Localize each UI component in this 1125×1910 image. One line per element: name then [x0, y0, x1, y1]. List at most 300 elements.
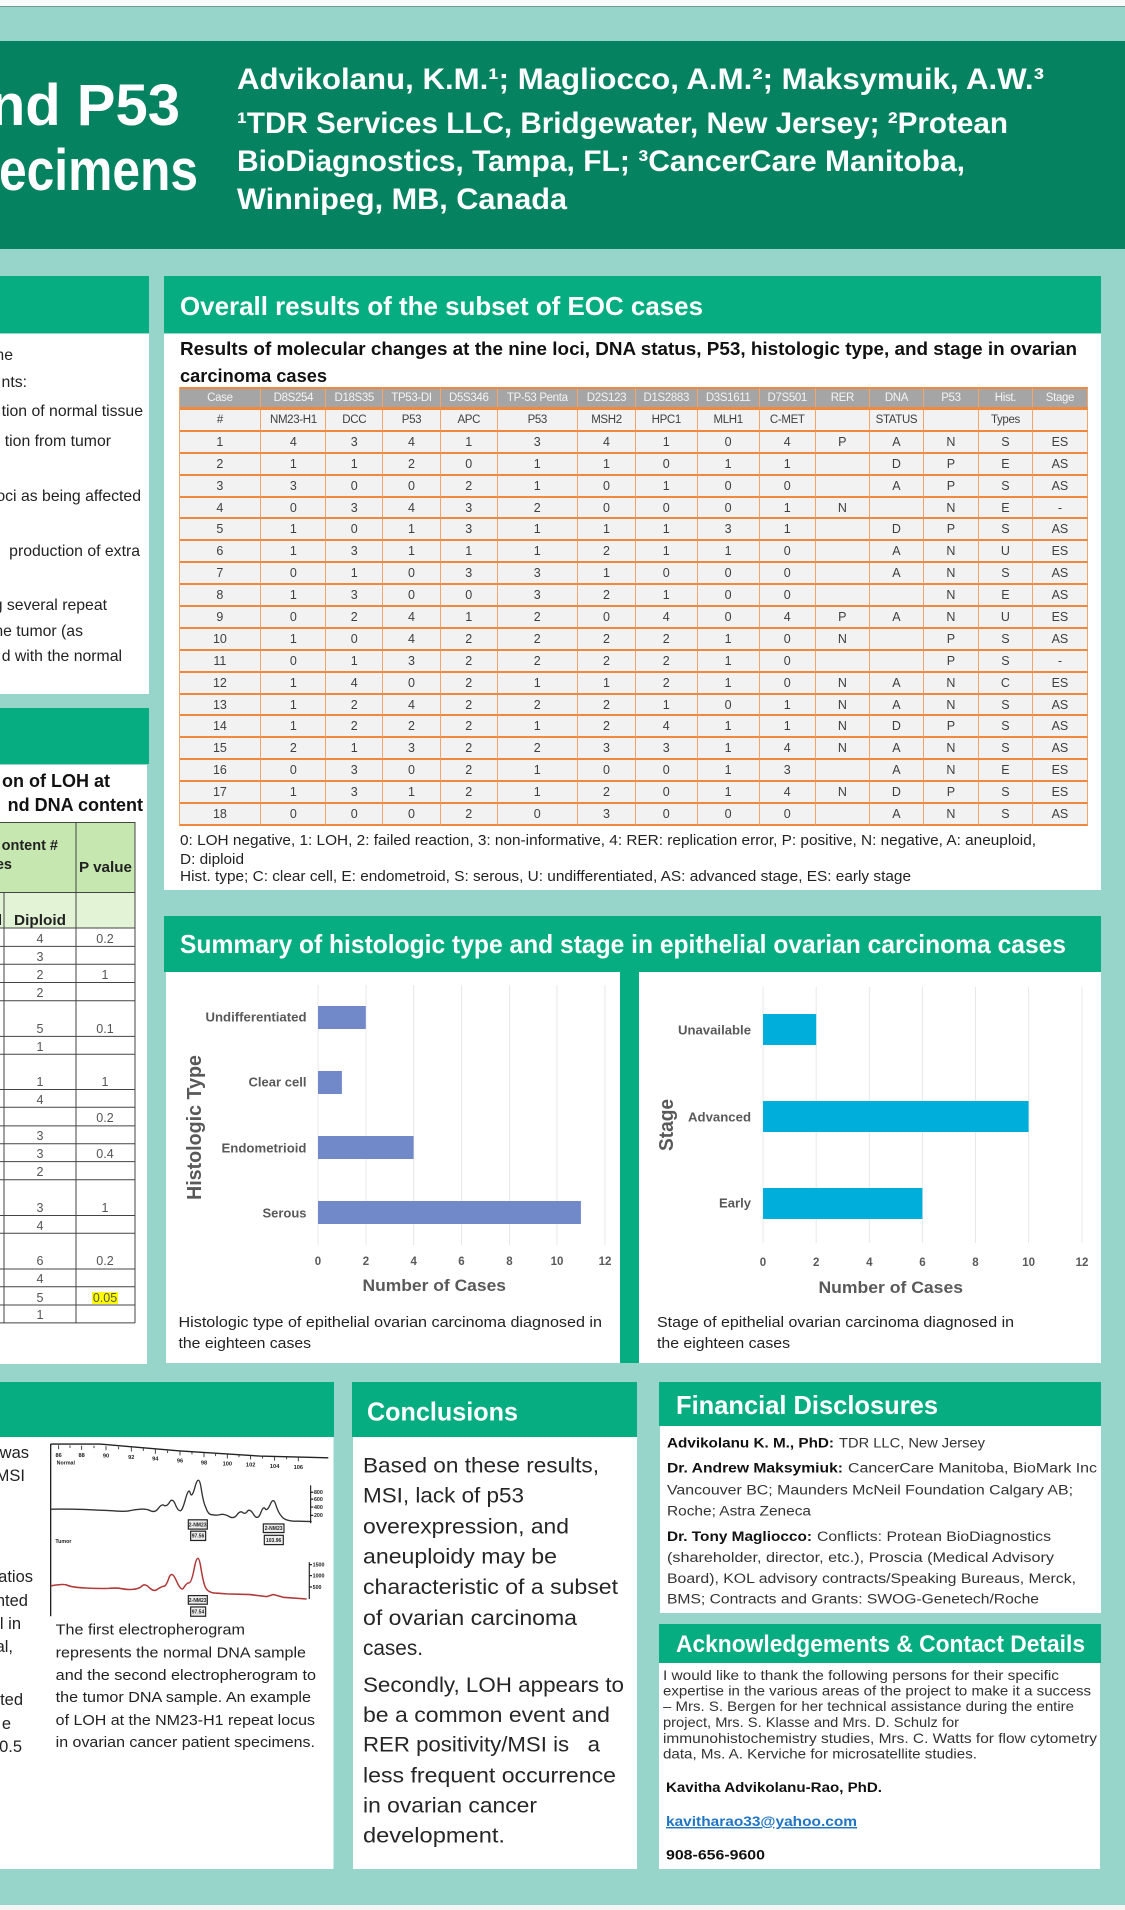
results table: molecular changes at nine loci: S: [1001, 807, 1010, 821]
results table: molecular changes at nine loci: N: [838, 500, 847, 514]
results table: molecular changes at nine loci: 0: [408, 676, 415, 690]
results table: molecular changes at nine loci: 0: [784, 566, 791, 580]
electropherogram figure: 94: [152, 1457, 159, 1463]
results table: molecular changes at nine loci: 12: [213, 676, 227, 690]
table legend: D: diploid: [180, 852, 244, 868]
table legend: [180, 833, 1036, 885]
electropherogram figure: 97.56: [192, 1534, 204, 1540]
results table: molecular changes at nine loci: S: [1001, 698, 1010, 712]
results table: molecular changes at nine loci: 2: [603, 544, 610, 558]
results table: molecular changes at nine loci: N: [946, 698, 955, 712]
panel: overall results: [164, 276, 1101, 890]
results table: molecular changes at nine loci: 3: [603, 741, 610, 755]
results table: molecular changes at nine loci: 2: [603, 719, 610, 733]
panel heading: Summary of histologic type and stage in epithelial ovarian carcinoma cases: [180, 929, 1066, 959]
results table: molecular changes at nine loci: 0: [351, 479, 358, 493]
results table: molecular changes at nine loci: 2: [663, 676, 670, 690]
results table: molecular changes at nine loci: 1: [351, 566, 358, 580]
results table: molecular changes at nine loci: S: [1001, 435, 1010, 449]
results table: molecular changes at nine loci: C: [1001, 676, 1010, 690]
results table: molecular changes at nine loci: 2: [465, 719, 472, 733]
disclosures text: Vancouver BC; Maunders McNeil Foundation Calgary AB;: [667, 1483, 1073, 1499]
results table: molecular changes at nine loci: 0: [290, 654, 297, 668]
results table: molecular changes at nine loci: AS: [1052, 522, 1068, 536]
results table: molecular changes at nine loci: N: [946, 763, 955, 777]
results table: molecular changes at nine loci: 0: [408, 479, 415, 493]
acknowledgements text: immunohistochemistry studies, Mrs. C. Watts for flow cytometry: [663, 1731, 1097, 1746]
results table: molecular changes at nine loci: AS: [1052, 719, 1068, 733]
results table: molecular changes at nine loci: P: [947, 785, 955, 799]
results table: molecular changes at nine loci: P: [838, 610, 847, 624]
bar chart: stage: Stage: [656, 1099, 678, 1151]
electropherogram figure: 86: [56, 1453, 62, 1459]
results table: molecular changes at nine loci: 2: [534, 654, 541, 668]
results table: molecular changes at nine loci: A: [892, 698, 901, 712]
results table: molecular changes at nine loci: 16: [213, 763, 227, 777]
bar chart: histologic type: 4: [410, 1256, 417, 1268]
results table: molecular changes at nine loci: AS: [1052, 566, 1068, 580]
results table: molecular changes at nine loci: ES: [1052, 544, 1068, 558]
acknowledgements text: – Mrs. S. Bergen for her technical assistance during the entire: [663, 1699, 1074, 1714]
conclusions text: overexpression, and: [363, 1515, 569, 1539]
chart caption: histologic type: [178, 1314, 602, 1352]
authors and affiliations: [237, 63, 1044, 216]
results table: molecular changes at nine loci: 0: [784, 588, 791, 602]
results table: molecular changes at nine loci: S: [1001, 632, 1010, 646]
panel heading: Overall results of the subset of EOC cases: [180, 291, 703, 321]
results table: molecular changes at nine loci: D: [892, 785, 901, 799]
LOH table: 2: [37, 986, 44, 1000]
results table: molecular changes at nine loci: E: [1001, 763, 1010, 777]
definitions text: oci as being affected: [0, 488, 141, 505]
LOH table: 1: [102, 968, 109, 982]
results table: molecular changes at nine loci: D5S346: [449, 392, 489, 404]
results table: molecular changes at nine loci: 0: [784, 676, 791, 690]
results table: molecular changes at nine loci: ES: [1052, 435, 1068, 449]
disclosures text: Dr. Tony Magliocco:: [667, 1529, 812, 1545]
results table: molecular changes at nine loci: 2: [663, 632, 670, 646]
results table: molecular changes at nine loci: 11: [213, 654, 226, 668]
results table: molecular changes at nine loci: 1: [465, 610, 472, 624]
results table: molecular changes at nine loci: S: [1001, 522, 1010, 536]
results table: molecular changes at nine loci: P: [947, 479, 955, 493]
LOH table: Diploid: [14, 913, 66, 929]
table caption: Results of molecular changes at the nine loci, DNA status, P53, histologic type, and stage in ovarian: [180, 338, 1077, 359]
results table: molecular changes at nine loci: 1: [784, 698, 791, 712]
figure caption: represents the normal DNA sample: [56, 1644, 306, 1662]
results table: molecular changes at nine loci: 3: [465, 522, 472, 536]
results table: molecular changes at nine loci: 7: [216, 566, 223, 580]
results table: molecular changes at nine loci: P53: [402, 414, 421, 426]
results table: molecular changes at nine loci: N: [838, 676, 847, 690]
table caption: [180, 338, 1077, 386]
panel heading: Conclusions: [367, 1396, 518, 1426]
bar chart: histologic type: Undifferentiated: [206, 1010, 306, 1024]
results table: molecular changes at nine loci: 0: [290, 807, 297, 821]
results table: molecular changes at nine loci: U: [1001, 610, 1010, 624]
results table: molecular changes at nine loci: 2: [465, 676, 472, 690]
results table: molecular changes at nine loci: D: [892, 522, 901, 536]
results table: molecular changes at nine loci: -: [1058, 654, 1062, 668]
results table: molecular changes at nine loci: D: [892, 719, 901, 733]
electropherogram figure: Tumor: [55, 1539, 72, 1545]
electropherogram figure: 102: [246, 1462, 255, 1468]
results table: molecular changes at nine loci: 0: [290, 566, 297, 580]
results table: molecular changes at nine loci: 0: [663, 457, 670, 471]
results table: molecular changes at nine loci: 4: [408, 632, 415, 646]
LOH table: [0, 822, 135, 1323]
bar chart: stage: 6: [919, 1257, 926, 1269]
panel: conclusions: [352, 1382, 637, 1869]
results table: molecular changes at nine loci: 1: [603, 457, 610, 471]
results table: molecular changes at nine loci: #: [217, 414, 223, 426]
results table: molecular changes at nine loci: A: [892, 807, 901, 821]
results table: molecular changes at nine loci: N: [946, 588, 955, 602]
LOH table: 5: [37, 1022, 44, 1036]
results table: molecular changes at nine loci: 6: [216, 544, 223, 558]
results table: molecular changes at nine loci: 4: [408, 610, 415, 624]
results table: molecular changes at nine loci: 1: [725, 719, 732, 733]
results table: molecular changes at nine loci: 1: [290, 457, 297, 471]
results table: molecular changes at nine loci: 0: [290, 610, 297, 624]
authors and affiliations: ¹TDR Services LLC, Bridgewater, New Jersey; ²Protean: [237, 107, 1008, 140]
disclosures text: (shareholder, director, etc.), Proscia (Medical Advisory: [667, 1550, 1055, 1566]
results table: molecular changes at nine loci: 2: [351, 610, 358, 624]
results table: molecular changes at nine loci: 1: [408, 522, 415, 536]
bar chart: histologic type: Clear cell: [248, 1076, 306, 1090]
LOH table: 0.05: [93, 1291, 117, 1305]
bar chart: stage: 12: [1076, 1257, 1088, 1269]
results table: molecular changes at nine loci: 2: [465, 807, 472, 821]
results table: molecular changes at nine loci: 13: [213, 698, 227, 712]
results table: molecular changes at nine loci: 3: [351, 544, 358, 558]
results table: molecular changes at nine loci: ES: [1052, 763, 1068, 777]
results table: molecular changes at nine loci: 0: [725, 610, 732, 624]
results table: molecular changes at nine loci: S: [1001, 566, 1010, 580]
conclusions text: Secondly, LOH appears to: [363, 1673, 624, 1697]
results table: molecular changes at nine loci: 2: [465, 654, 472, 668]
results table: molecular changes at nine loci: D8S254: [274, 392, 313, 404]
results table: molecular changes at nine loci: N: [946, 741, 955, 755]
results table: molecular changes at nine loci: 1: [725, 676, 732, 690]
results table: molecular changes at nine loci: 2: [534, 741, 541, 755]
LOH table: P value: [79, 860, 132, 876]
results table: molecular changes at nine loci: 3: [534, 435, 541, 449]
results table: molecular changes at nine loci: 8: [216, 588, 223, 602]
figure caption: of LOH at the NM23-H1 repeat locus: [56, 1712, 315, 1729]
conclusions text: less frequent occurrence: [363, 1764, 616, 1788]
results table: molecular changes at nine loci: 2: [408, 457, 415, 471]
results table: molecular changes at nine loci: 4: [663, 719, 670, 733]
results table: molecular changes at nine loci: STATUS: [876, 414, 917, 426]
chart caption: histologic type: the eighteen cases: [178, 1335, 311, 1352]
results table: molecular changes at nine loci: S: [1001, 719, 1010, 733]
results table: molecular changes at nine loci: 3: [534, 566, 541, 580]
results table: molecular changes at nine loci: 0: [408, 763, 415, 777]
results table: molecular changes at nine loci: 2: [663, 654, 670, 668]
results table: molecular changes at nine loci: 2: [465, 698, 472, 712]
panel: summary of histologic type and stage: [164, 916, 1101, 1363]
results table: molecular changes at nine loci: A: [892, 763, 901, 777]
results table: molecular changes at nine loci: 15: [213, 741, 227, 755]
contact details: Kavitha Advikolanu-Rao, PhD.: [666, 1780, 882, 1796]
results table: molecular changes at nine loci: 3: [351, 785, 358, 799]
results table: molecular changes at nine loci: 1: [725, 544, 732, 558]
LOH table: 1: [37, 1308, 44, 1322]
disclosures text: [667, 1436, 1097, 1608]
results table: molecular changes at nine loci: 0: [408, 807, 415, 821]
results table: molecular changes at nine loci: 3: [351, 500, 358, 514]
authors and affiliations: Advikolanu, K.M.¹; Magliocco, A.M.²; Maksymuik, A.W.³: [237, 63, 1044, 96]
results table: molecular changes at nine loci: NM23-H1: [270, 414, 317, 426]
bar chart: stage: 0: [760, 1257, 766, 1269]
LOH table: 1: [37, 1075, 44, 1089]
results table: molecular changes at nine loci: 2: [603, 588, 610, 602]
bar chart: histologic type: 2: [363, 1256, 369, 1268]
bar chart: histologic type: 8: [506, 1256, 513, 1268]
figure caption: The first electropherogram: [56, 1622, 245, 1638]
results table: molecular changes at nine loci: 0: [534, 807, 541, 821]
results table: molecular changes at nine loci: 3: [351, 435, 358, 449]
LOH table: 0.2: [96, 932, 114, 946]
table caption: carcinoma cases: [180, 365, 327, 386]
results table: molecular changes at nine loci: RER: [831, 392, 854, 404]
results table: molecular changes at nine loci: AS: [1052, 457, 1068, 471]
cropped body text: [0, 1444, 33, 1756]
results table: molecular changes at nine loci: Types: [991, 414, 1020, 426]
results table: molecular changes at nine loci: 3: [465, 566, 472, 580]
electropherogram figure: 104: [270, 1464, 280, 1470]
results table: molecular changes at nine loci: 0: [663, 807, 670, 821]
results table: molecular changes at nine loci: 0: [784, 807, 791, 821]
results table: molecular changes at nine loci: 3: [216, 479, 223, 493]
electropherogram figure: 1500: [313, 1563, 324, 1569]
results table: molecular changes at nine loci: 0: [465, 588, 472, 602]
results table: molecular changes at nine loci: 0: [725, 588, 732, 602]
contact details: kavitharao33@yahoo.com: [666, 1814, 857, 1830]
results table: molecular changes at nine loci: 9: [216, 610, 223, 624]
results table: molecular changes at nine loci: 0: [725, 807, 732, 821]
results table: molecular changes at nine loci: 1: [534, 544, 541, 558]
results table: molecular changes at nine loci: 1: [290, 588, 297, 602]
figure caption: [56, 1622, 316, 1751]
results table: molecular changes at nine loci: A: [892, 544, 901, 558]
acknowledgements text: expertise in the various areas of the project to make it a success: [663, 1683, 1091, 1698]
results table: molecular changes at nine loci: D3S1611: [706, 392, 750, 404]
results table: molecular changes at nine loci: 3: [534, 588, 541, 602]
results table: molecular changes at nine loci: S: [1001, 654, 1010, 668]
results table: molecular changes at nine loci: D1S2883: [644, 392, 689, 404]
results table: molecular changes at nine loci: AS: [1052, 698, 1068, 712]
results table: molecular changes at nine loci: 0: [603, 500, 610, 514]
results table: molecular changes at nine loci: 1: [351, 654, 358, 668]
acknowledgements text: I would like to thank the following persons for their specific: [663, 1668, 1059, 1683]
disclosures text: Dr. Andrew Maksymiuk:: [667, 1461, 843, 1477]
results table: molecular changes at nine loci: A: [892, 610, 901, 624]
results table: molecular changes at nine loci: P: [947, 654, 955, 668]
results table: molecular changes at nine loci: 0: [603, 479, 610, 493]
results table: molecular changes at nine loci: 0: [784, 479, 791, 493]
table heading: nd DNA content: [8, 795, 143, 815]
conclusions text: aneuploidy may be: [363, 1544, 557, 1568]
results table: molecular changes at nine loci: N: [946, 610, 955, 624]
results table: molecular changes at nine loci: 1: [603, 676, 610, 690]
results table: molecular changes at nine loci: 0: [784, 632, 791, 646]
definitions text: d with the normal: [2, 648, 122, 665]
results table: molecular changes at nine loci: 4: [351, 676, 358, 690]
conclusions text: development.: [363, 1824, 505, 1848]
electropherogram figure: 2-NM23: [189, 1522, 207, 1528]
bar chart: stage: 2: [813, 1257, 819, 1269]
disclosures text: Board), KOL advisory contracts/Speaking Bureaus, Merck,: [667, 1571, 1076, 1587]
results table: molecular changes at nine loci: 4: [290, 435, 297, 449]
cropped body text: l in: [0, 1615, 21, 1633]
LOH table: 2: [37, 968, 44, 982]
results table: molecular changes at nine loci: 0: [663, 763, 670, 777]
authors and affiliations: BioDiagnostics, Tampa, FL; ³CancerCare Manitoba,: [237, 145, 965, 178]
electropherogram figure: 2-NM23: [265, 1526, 283, 1532]
LOH table: 5: [37, 1291, 44, 1305]
results table: molecular changes at nine loci: 1: [465, 435, 472, 449]
bar chart: histologic type: 0: [315, 1256, 321, 1268]
results table: molecular changes at nine loci: MLH1: [714, 414, 743, 426]
results table: molecular changes at nine loci: 1: [534, 719, 541, 733]
results table: molecular changes at nine loci: D18S35: [334, 392, 374, 404]
results table: molecular changes at nine loci: 1: [725, 654, 732, 668]
results table: molecular changes at nine loci: 1: [663, 544, 670, 558]
results table: molecular changes at nine loci: 1: [534, 676, 541, 690]
panel heading: Acknowledgements & Contact Details: [676, 1631, 1085, 1658]
disclosures text: Roche; Astra Zeneca: [667, 1504, 811, 1520]
LOH table: 4: [37, 932, 44, 946]
figure caption: and the second electropherogram to: [56, 1667, 316, 1684]
results table: molecular changes at nine loci: 1: [725, 763, 732, 777]
results table: molecular changes at nine loci: N: [838, 741, 847, 755]
bar chart: stage: 8: [972, 1257, 979, 1269]
panel: methods and electropherogram (cropped left): [0, 1382, 334, 1869]
results table: molecular changes at nine loci: 0: [725, 479, 732, 493]
results table: molecular changes at nine loci: 2: [465, 741, 472, 755]
results table: molecular changes at nine loci: U: [1001, 544, 1010, 558]
results table: molecular changes at nine loci: DNA: [885, 392, 908, 404]
LOH table: 6: [37, 1254, 44, 1268]
results table: molecular changes at nine loci: 17: [213, 785, 227, 799]
results table: molecular changes at nine loci: 1: [663, 435, 670, 449]
electropherogram figure: 1000: [313, 1574, 324, 1580]
results table: molecular changes at nine loci: 2: [408, 719, 415, 733]
results table: molecular changes at nine loci: MSH2: [591, 414, 622, 426]
results table: molecular changes at nine loci: 3: [408, 654, 415, 668]
results table: molecular changes at nine loci: 2: [603, 698, 610, 712]
LOH table: 4: [37, 1219, 44, 1233]
figure caption: in ovarian cancer patient specimens.: [56, 1734, 315, 1751]
results table: molecular changes at nine loci: N: [946, 500, 955, 514]
results table: molecular changes at nine loci: 1: [290, 676, 297, 690]
results table: molecular changes at nine loci: 0: [784, 654, 791, 668]
bar chart: stage: Advanced: [688, 1110, 751, 1124]
results table: molecular changes at nine loci: 2: [290, 741, 297, 755]
results table: molecular changes at nine loci: 0: [725, 500, 732, 514]
cropped body text: was: [0, 1444, 29, 1462]
results table: molecular changes at nine loci: HPC1: [652, 414, 681, 426]
electropherogram figure: 400: [314, 1505, 323, 1511]
results table: molecular changes at nine loci: AS: [1052, 741, 1068, 755]
results table: molecular changes at nine loci: N: [838, 719, 847, 733]
conclusions text: of ovarian carcinoma: [363, 1606, 577, 1630]
LOH table: 0.2: [96, 1254, 114, 1268]
results table: molecular changes at nine loci: 0: [351, 807, 358, 821]
LOH table: 3: [37, 1201, 44, 1215]
electropherogram figure: 100: [223, 1462, 232, 1468]
definitions text: tion of normal tissue: [2, 403, 143, 420]
results table: molecular changes at nine loci: 0: [290, 763, 297, 777]
results table: molecular changes at nine loci: 18: [213, 807, 227, 821]
results table: molecular changes at nine loci: N: [838, 632, 847, 646]
results table: molecular changes at nine loci: ES: [1052, 676, 1068, 690]
results table: molecular changes at nine loci: AS: [1052, 588, 1068, 602]
results table: molecular changes at nine loci: 1: [784, 719, 791, 733]
results table: molecular changes at nine loci: N: [946, 435, 955, 449]
results table: molecular changes at nine loci: 2: [603, 654, 610, 668]
LOH table: ontent #: [2, 838, 58, 854]
bar chart: histologic type: Number of Cases: [362, 1277, 506, 1295]
results table: molecular changes at nine loci: 1: [663, 522, 670, 536]
bar chart: stage: 10: [1022, 1257, 1035, 1269]
results table: molecular changes at nine loci: 2: [351, 719, 358, 733]
results table: molecular changes at nine loci: N: [946, 544, 955, 558]
results table: molecular changes at nine loci: 2: [351, 698, 358, 712]
results table: molecular changes at nine loci: 0: [725, 566, 732, 580]
results table: molecular changes at nine loci: A: [892, 479, 901, 493]
results table: molecular changes at nine loci: 1: [725, 785, 732, 799]
results table: molecular changes at nine loci: 1: [408, 544, 415, 558]
conclusions text: RER positivity/MSI is a: [363, 1732, 600, 1756]
results table: molecular changes at nine loci: 4: [663, 610, 670, 624]
LOH table: 2: [37, 1165, 44, 1179]
electropherogram figure: 88: [79, 1453, 86, 1459]
results table: molecular changes at nine loci: 1: [663, 698, 670, 712]
LOH table: 3: [37, 1147, 44, 1161]
electropherogram figure: Normal: [57, 1461, 75, 1467]
electropherogram figure: 96: [177, 1458, 183, 1464]
results table: molecular changes at nine loci: DCC: [342, 414, 366, 426]
conclusions text: characteristic of a subset: [363, 1575, 618, 1599]
results table: molecular changes at nine loci: 2: [465, 632, 472, 646]
results table: molecular changes at nine loci: 1: [290, 785, 297, 799]
results table: molecular changes at nine loci: 0: [784, 544, 791, 558]
results table: molecular changes at nine loci: 1: [290, 698, 297, 712]
results table: molecular changes at nine loci: 4: [784, 610, 791, 624]
results table: molecular changes at nine loci: 3: [663, 741, 670, 755]
results table: molecular changes at nine loci: 3: [603, 807, 610, 821]
results table: molecular changes at nine loci: D2S123: [587, 392, 626, 404]
LOH table: 4: [37, 1272, 44, 1286]
electropherogram figure: 90: [103, 1453, 109, 1460]
results table: molecular changes at nine loci: E: [1001, 457, 1010, 471]
results table: molecular changes at nine loci: 3: [784, 763, 791, 777]
results table: molecular changes at nine loci: 3: [351, 763, 358, 777]
LOH table: 0.4: [96, 1147, 114, 1161]
results table: molecular changes at nine loci: S: [1001, 785, 1010, 799]
results table: molecular changes at nine loci: 2: [603, 785, 610, 799]
bar chart: histologic type: 10: [551, 1256, 563, 1268]
results table: molecular changes at nine loci: P: [947, 457, 955, 471]
acknowledgements text: project, Mrs. S. Klasse and Mrs. D. Schulz for: [663, 1715, 959, 1730]
conclusions text: be a common event and: [363, 1703, 610, 1727]
results table: molecular changes at nine loci: 10: [213, 632, 227, 646]
results table: molecular changes at nine loci: 1: [784, 457, 791, 471]
LOH table: 1: [102, 1201, 109, 1215]
